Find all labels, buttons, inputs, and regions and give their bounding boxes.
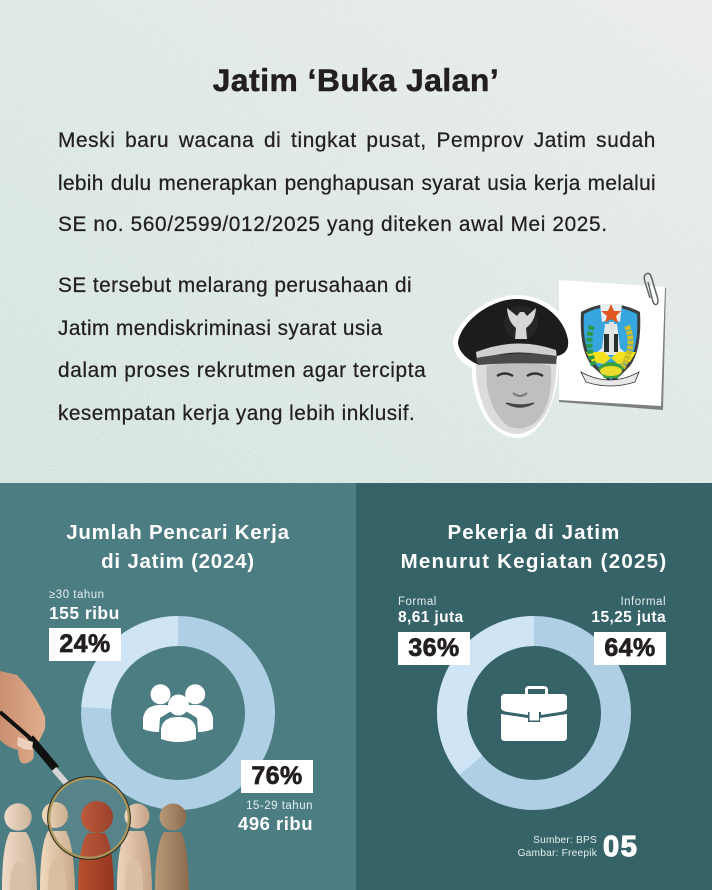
intro paragraph: lebih dulu menerapkan penghapusan syarat usia kerja melalui [58,172,656,195]
thumb nail [17,737,33,750]
icon: briefcase [501,686,567,741]
donut chart: formal vs informal [452,631,616,795]
callout: 15-29 age group: 15-29 tahun [246,800,313,812]
callout: 30+ age group: 155 ribu [49,603,120,623]
source credits: Sumber: BPS [533,835,597,846]
second paragraph: Jatim mendiskriminasi syarat usia [58,317,383,340]
donut chart: age groups [96,631,260,795]
source credits: Gambar: Freepik [518,848,597,858]
magnifier [0,712,130,859]
value: 64%: 64% [604,634,656,662]
heading: job seekers [66,521,290,573]
second paragraph: SE tersebut melarang perusahaan di [58,274,412,297]
pinned paper note [559,273,666,410]
hand [0,671,45,764]
intro paragraph: SE no. 560/2599/012/2025 yang diteken awal Mei 2025. [58,213,608,236]
intro paragraph: Meski baru wacana di tingkat pusat, Pemprov Jatim sudah [58,129,656,152]
callout: informal workers: 15,25 juta [591,609,666,626]
value: 24%: 24% [59,630,111,658]
emblem shield [581,304,640,386]
figure 5 [155,804,189,890]
callout: 15-29 age group [238,760,313,834]
callout: 30+ age group: ≥30 tahun [49,589,105,601]
heading: job seekers: di Jatim (2024) [101,550,255,573]
callout: formal workers: 8,61 juta [398,609,464,626]
value: 24% [49,628,121,661]
figure 3: red [78,801,114,890]
icon: people [143,684,213,742]
callout: formal workers: Formal [398,596,437,608]
value: 76%: 76% [251,762,303,790]
figure 2 [40,802,75,890]
callout: 30+ age group [49,589,121,661]
second paragraph: dalam proses rekrutmen agar tercipta [58,359,426,382]
value: 64% [594,632,666,665]
heading: workers: Menurut Kegiatan (2025) [401,550,667,573]
value: 76% [241,760,313,793]
callout: 15-29 age group: 496 ribu [238,813,313,834]
source credits [518,835,597,858]
illustration: governor portrait and provincial emblem note [453,272,666,438]
heading: workers [401,521,667,573]
heading: job seekers: Jumlah Pencari Kerja [66,521,290,544]
panel: workers by activity [356,483,712,890]
illustration: wooden figures, hand and magnifier [0,671,189,890]
paperclip [644,273,658,305]
heading: workers: Pekerja di Jatim [448,521,620,544]
value: 36%: 36% [408,634,460,662]
governor portrait sticker [453,295,573,438]
intro paragraph [58,129,656,236]
figure 1 [2,803,37,890]
second paragraph [58,274,426,425]
value: 36% [398,632,470,665]
page number: 05 [603,831,638,863]
panel: job seekers in East Java [0,483,356,890]
title: Jatim ‘Buka Jalan’ [213,62,499,98]
callout: informal workers: Informal [620,596,666,608]
callout: formal workers [398,596,470,665]
cap badge [504,306,538,340]
callout: informal workers [591,596,666,665]
figure 4 [117,804,152,890]
second paragraph: kesempatan kerja yang lebih inklusif. [58,402,415,425]
